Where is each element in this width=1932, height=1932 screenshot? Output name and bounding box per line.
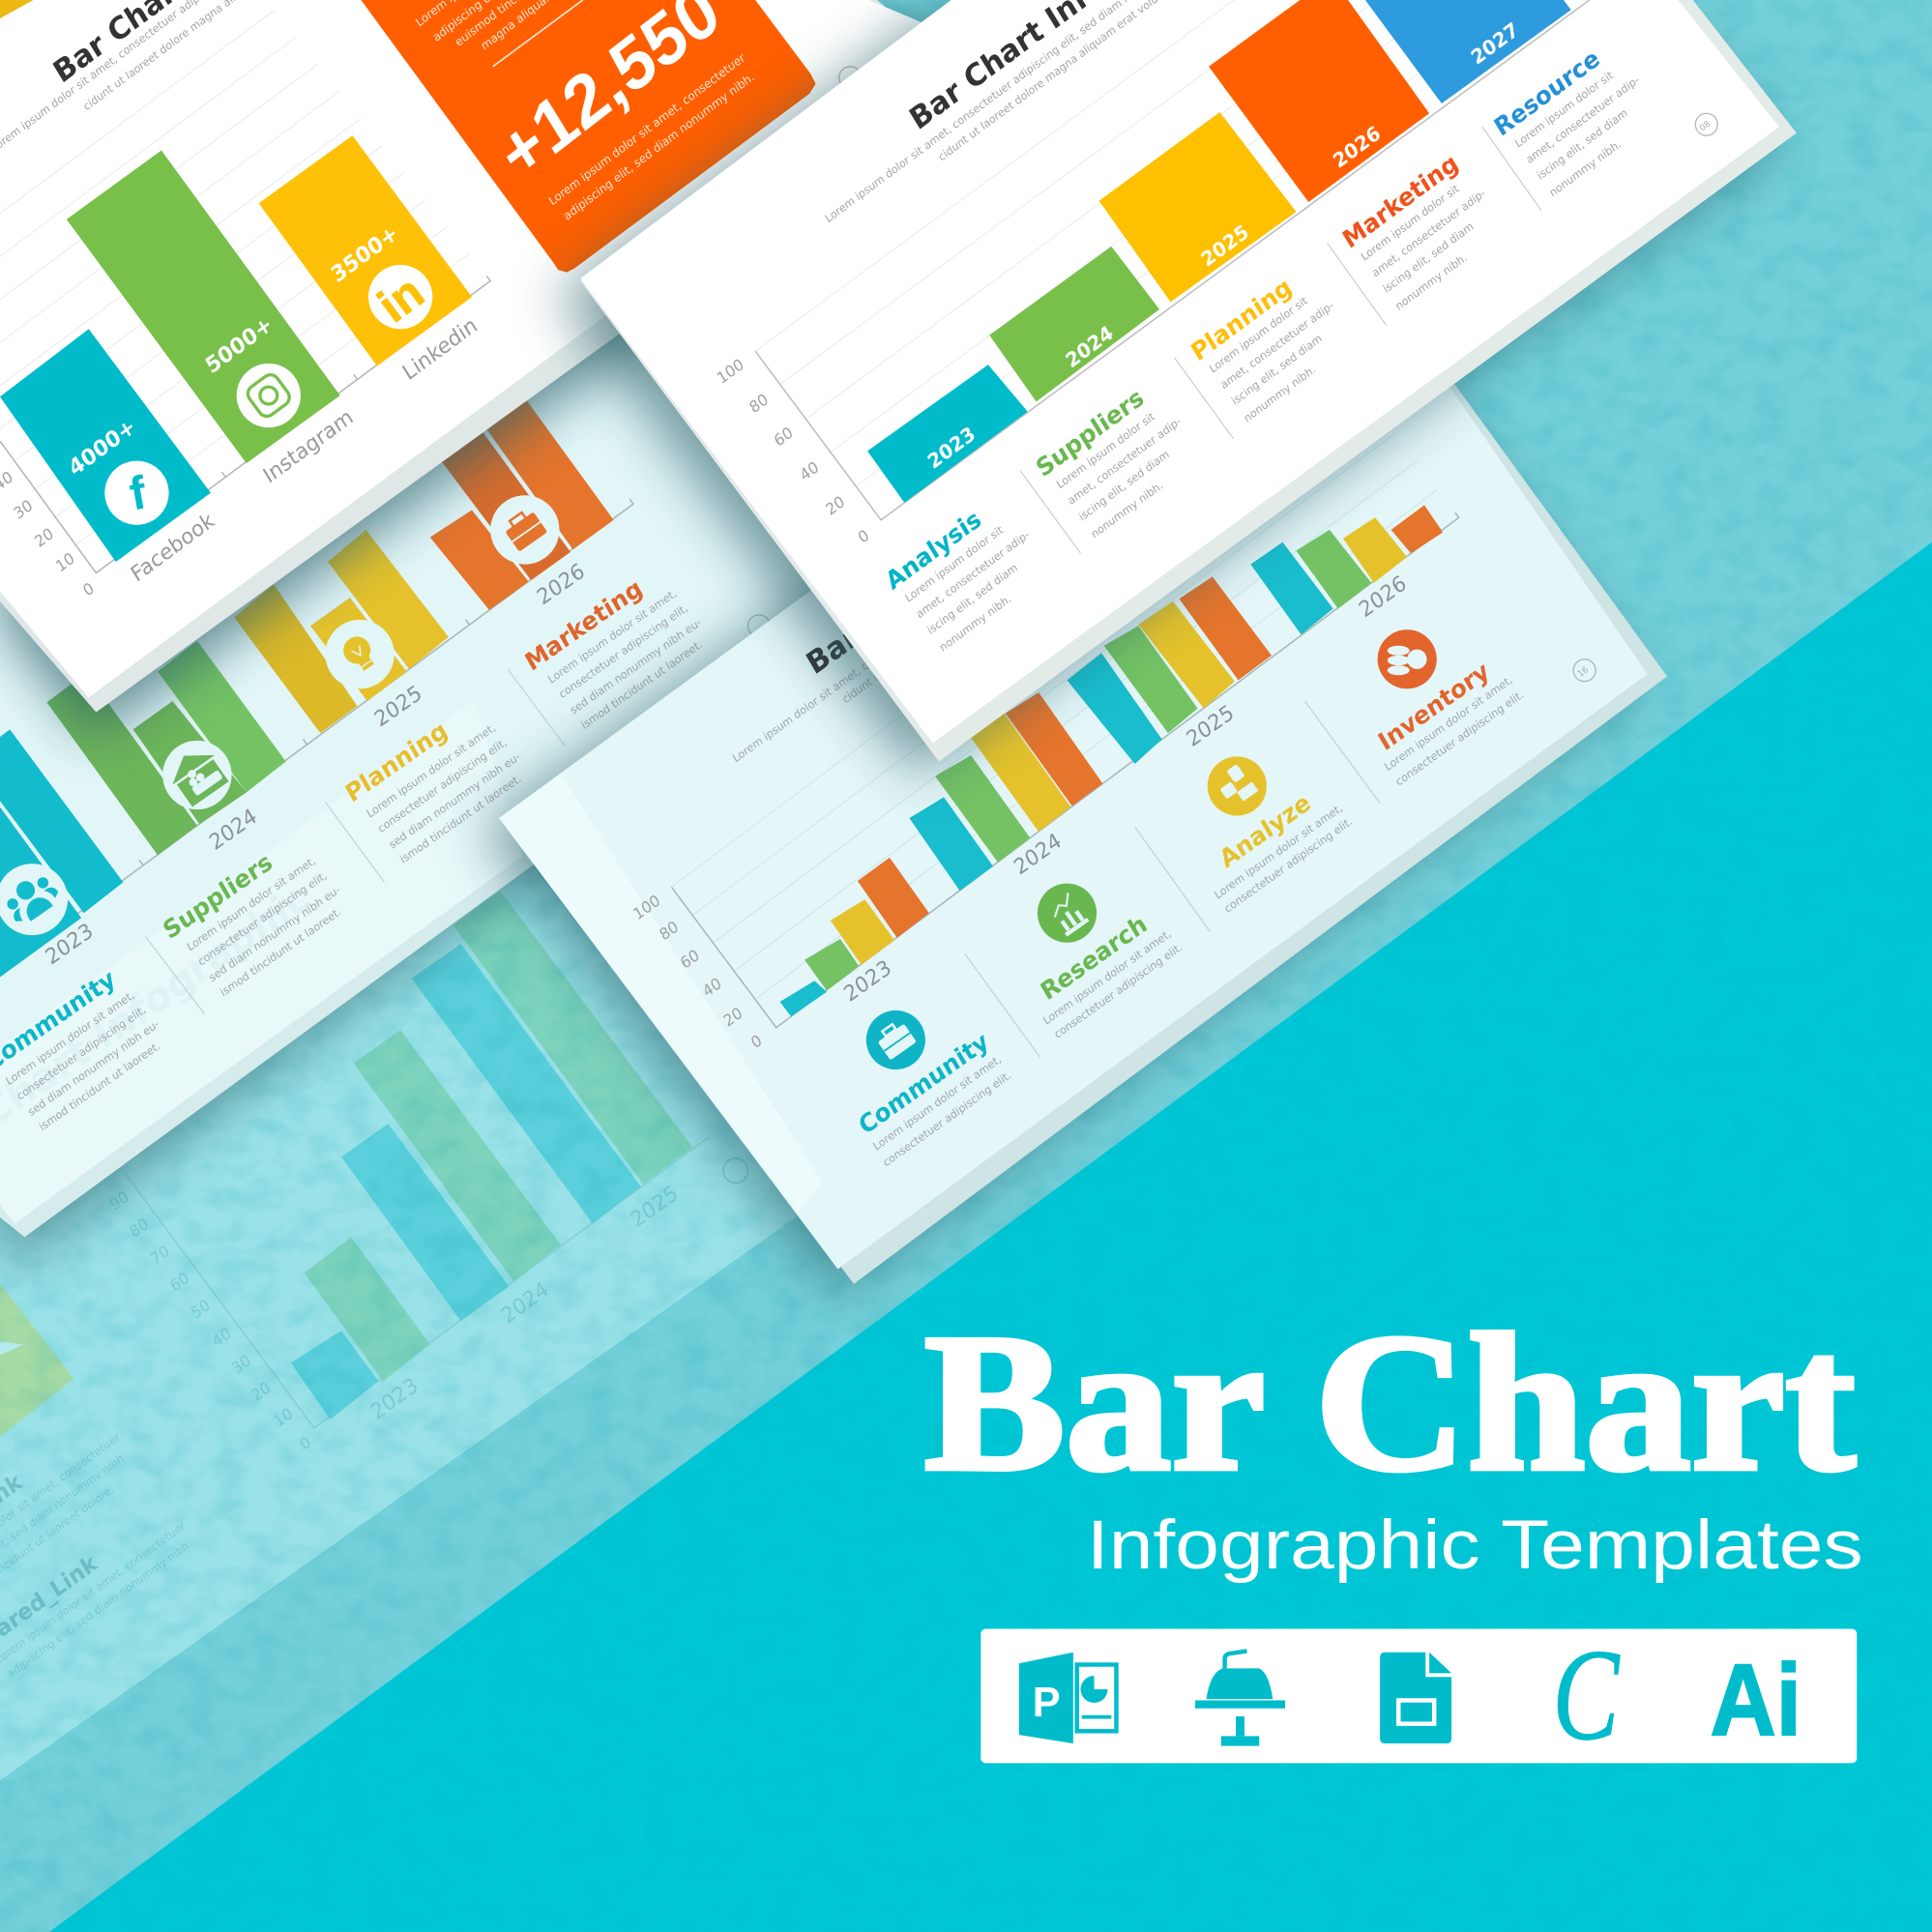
axis labels: 60 [771, 423, 796, 451]
page number [747, 615, 770, 637]
column: resource: amet, consectetuer adip- [1524, 73, 1642, 166]
column: suppliers: amet, consectetuer adip- [1066, 414, 1184, 508]
column: analyze: Lorem ipsum dolor sit amet, [1212, 801, 1345, 902]
column: suppliers: iscing elit, sed diam [1076, 447, 1171, 524]
axis [755, 0, 1590, 520]
faded axis labels: 60 [167, 1268, 192, 1296]
page number [839, 67, 862, 89]
icon: fists [1196, 745, 1278, 828]
column: analyze: Analyze [1215, 788, 1315, 873]
icon: Keynote [1195, 1651, 1285, 1746]
faded axis labels: 2025 [627, 1181, 683, 1233]
column: marketing: ismod tincidunt ut laoreet. [578, 637, 705, 732]
axis [0, 276, 490, 573]
icon: PowerPoint: P [1033, 1680, 1061, 1726]
column: inventory: Lorem ipsum dolor sit amet, [1382, 672, 1514, 774]
year labels: 2023 [840, 955, 895, 1008]
bar: facebook: f [126, 466, 151, 520]
axis labels: 80 [657, 917, 682, 944]
bar: facebook [0, 329, 211, 562]
bars 2024 [909, 692, 1102, 891]
column: analyze: consectetuer adipiscing elit. [1222, 814, 1355, 916]
bar 2025 [1099, 112, 1296, 302]
column: community: consectetuer adipiscing elit, [15, 1003, 148, 1102]
icon: coins [1378, 629, 1437, 688]
category labels: Linkedin [398, 313, 482, 386]
axis labels: 100 [630, 891, 663, 923]
icon: briefcase [855, 999, 937, 1081]
bar: instagram [67, 150, 340, 463]
axis labels: 80 [746, 390, 772, 417]
year labels: 2024 [1010, 829, 1066, 881]
column: marketing: sed diam nonummy nibh eu- [568, 615, 704, 717]
icon: people [0, 850, 82, 950]
faded page number [723, 1158, 747, 1183]
column: community [0, 964, 162, 1133]
year labels: 2025 [370, 681, 426, 733]
bars 2026 [430, 398, 614, 610]
column: community [854, 999, 1013, 1169]
bar: linkedin: in [368, 266, 433, 333]
column: planning: sed diam nonummy nibh eu- [387, 749, 522, 852]
bar: facebook: 4000+ [65, 414, 140, 482]
column: marketing: Lorem ipsum dolor sit amet, [545, 586, 679, 687]
column: analysis: Analysis [881, 505, 986, 596]
axis labels [630, 891, 765, 1052]
axis labels: 40 [699, 974, 724, 1001]
faded axis labels: 40 [209, 1324, 234, 1351]
column: planning: ismod tincidunt ut laoreet. [397, 771, 523, 866]
lighter strip [499, 774, 822, 1213]
slide C subtitle: cidunt ut laoreet dolore magna aliquam [840, 568, 1024, 706]
faded axis labels: 70 [147, 1241, 172, 1269]
x axis [0, 499, 633, 971]
icon: Illustrator: Ai [1711, 1644, 1801, 1757]
bars 2023 [780, 858, 929, 1016]
year labels: 2026 [1355, 571, 1411, 623]
panel: orange callout [361, 0, 816, 273]
column: marketing: consectetuer adipiscing elit, [557, 600, 690, 701]
column: resource: Lorem ipsum dolor sit [1512, 68, 1616, 150]
column: suppliers: Lorem ipsum dolor sit amet, [185, 854, 318, 953]
shadow of slide C [482, 221, 1640, 1294]
column: marketing: Marketing [1337, 148, 1463, 254]
title: Bar Chart [924, 1294, 1856, 1512]
column: suppliers [159, 847, 343, 999]
column: marketing: iscing elit, sed diam [1381, 219, 1476, 296]
year labels: 2026 [534, 559, 589, 610]
faded axis labels: 90 [106, 1186, 132, 1215]
faded axis labels: 2024 [498, 1277, 553, 1330]
slide C title: Bar Chart Infographic [802, 444, 1111, 682]
column: resource: iscing elit, sed diam [1535, 105, 1630, 183]
column: community: Lorem ipsum dolor sit amet, [870, 1052, 1004, 1154]
column: planning: Planning [1186, 273, 1297, 366]
column: analysis: nonummy nibh. [937, 592, 1013, 655]
column: community: sed diam nonummy nibh eu- [25, 1016, 161, 1119]
panel: faded slide [0, 863, 801, 1780]
bars 2024 [46, 641, 286, 855]
lighter panel [0, 700, 522, 1223]
faded axis labels: 20 [249, 1378, 274, 1405]
icon: PowerPoint [1019, 1653, 1116, 1743]
column: suppliers: sed diam nonummy nibh eu- [207, 882, 342, 984]
corner accent [0, 0, 33, 18]
faded axis labels: 80 [127, 1214, 152, 1242]
bar 2026: 2026 [1329, 121, 1385, 173]
column: research [1026, 872, 1185, 1041]
subtitle: Infographic Templates [1087, 1507, 1863, 1584]
year labels: 2023 [42, 919, 98, 970]
panel: slide C [499, 384, 1667, 1284]
column: inventory [1373, 629, 1526, 789]
category labels [127, 313, 482, 588]
bars 2023 [0, 729, 123, 977]
axis labels: 20 [822, 492, 848, 519]
faded axis labels: 0 [297, 1432, 314, 1454]
column: planning: iscing elit, sed diam [1229, 331, 1325, 408]
year labels: 2024 [206, 805, 261, 856]
panel: software icons [981, 1624, 1857, 1768]
panel: slide A [580, 0, 1797, 761]
panel: slide B [0, 320, 887, 1237]
bar 2026 [1209, 0, 1429, 202]
column: resource [1489, 44, 1642, 199]
shadow of slide B [0, 320, 863, 1257]
faded axis labels: 10 [271, 1404, 296, 1431]
axis labels: 0 [79, 578, 97, 600]
axis labels: 40 [797, 457, 822, 484]
column: planning: Lorem ipsum dolor sit amet, [365, 720, 498, 821]
icon: warehouse truck [149, 727, 246, 823]
column: suppliers: consectetuer adipiscing elit, [195, 868, 329, 969]
faded axis labels: 30 [228, 1351, 254, 1378]
column: marketing: amet, consectetuer adip- [1369, 186, 1488, 279]
slide 1 subtitle [0, 0, 236, 148]
column: inventory: consectetuer adipiscing elit. [1393, 688, 1526, 789]
column: planning [1186, 273, 1336, 425]
icon: chart [1026, 872, 1108, 954]
column: analyze [1196, 745, 1355, 916]
icon: Canva: C [1553, 1624, 1621, 1768]
slide C subtitle [733, 663, 878, 762]
category labels: Instagram [259, 405, 358, 489]
axis labels [0, 467, 97, 600]
column: suppliers: Suppliers [1031, 383, 1149, 483]
column: analysis [881, 505, 1032, 655]
axis labels: 0 [747, 1031, 765, 1052]
year labels [42, 559, 589, 970]
bar 2027 [1365, 0, 1571, 103]
column: resource: nonummy nibh. [1547, 136, 1624, 199]
callout top text [416, 0, 549, 50]
column: analysis: Lorem ipsum dolor sit [902, 522, 1006, 605]
column: marketing: Marketing [520, 573, 647, 677]
faded axis labels: 2023 [366, 1373, 423, 1425]
axis [671, 512, 1459, 1028]
axis labels: 100 [714, 355, 746, 388]
bar: instagram: 5000+ [201, 311, 278, 379]
faded grid and axis [126, 1137, 709, 1428]
column: marketing [520, 573, 705, 732]
column: analysis: amet, consectetuer adip- [914, 527, 1032, 621]
column: suppliers [1031, 383, 1184, 541]
bar 2024 [989, 247, 1159, 401]
column: research: consectetuer adipiscing elit. [1052, 940, 1185, 1041]
shadow of slide 1 [0, 17, 985, 738]
axis labels: 0 [855, 526, 872, 547]
faded axis labels [106, 1181, 683, 1454]
faded text blocks: adipiscing elit, sed diam nonummy nibh [5, 1538, 191, 1681]
axis labels: 60 [677, 946, 702, 973]
bar: linkedin: 3500+ [327, 220, 403, 288]
callout bottom text: adipiscing elit, sed diam nonummy nibh. [561, 70, 756, 223]
column: research: Research [1036, 909, 1152, 1006]
page number: 08 [1698, 119, 1712, 133]
column: resource: Resource [1489, 44, 1604, 142]
column: inventory: Inventory [1373, 657, 1494, 756]
axis labels [714, 355, 872, 547]
column: marketing: Lorem ipsum dolor sit [1359, 181, 1462, 264]
bars 2026 [1250, 505, 1443, 634]
faded text blocks [0, 1430, 191, 1681]
faded axis labels: 50 [188, 1296, 214, 1323]
icon: briefcase [477, 482, 573, 578]
column: planning: consectetuer adipiscing elit, [375, 735, 509, 835]
column: suppliers: Lorem ipsum dolor sit [1054, 409, 1157, 491]
callout bottom text: Lorem ipsum dolor sit amet, consectetuer [546, 50, 747, 208]
solid teal diagonal area [49, 542, 1932, 1932]
column: marketing: nonummy nibh. [1392, 250, 1470, 313]
icon: Google Slides [1380, 1653, 1451, 1743]
bar 2024: 2024 [1062, 321, 1117, 372]
column: community: Lorem ipsum dolor sit amet, [3, 987, 136, 1088]
year labels [840, 571, 1411, 1008]
bar: linkedin [259, 135, 472, 366]
column: research: Lorem ipsum dolor sit amet, [1040, 926, 1173, 1028]
bars 2025 [1067, 576, 1272, 764]
bar 2025: 2025 [1197, 220, 1253, 272]
column: planning: Planning [340, 716, 452, 808]
bars 2025 [234, 530, 449, 733]
faded icon box [0, 1284, 73, 1437]
axis labels: 10 [52, 548, 77, 576]
column: suppliers: ismod tincidunt ut laoreet. [218, 904, 343, 999]
column: marketing [1337, 148, 1488, 313]
shadow of slide A [558, 15, 1774, 776]
column: planning: Lorem ipsum dolor sit [1207, 293, 1310, 376]
page number [1573, 659, 1595, 682]
bar 2027: 2027 [1467, 17, 1523, 70]
bar 2023 [867, 365, 1028, 503]
category labels: Facebook [127, 508, 220, 588]
column: community: Community [854, 1027, 993, 1140]
column: suppliers: Suppliers [159, 847, 277, 945]
icon: light bulb [311, 606, 408, 702]
page number: 16 [1576, 665, 1591, 680]
bar 2023: 2023 [923, 422, 980, 474]
slide C subtitle: Lorem ipsum dolor sit amet, consectetuer adipiscing elit, sed diam [730, 541, 1036, 765]
column: community: ismod tincidunt ut laoreet. [37, 1039, 162, 1133]
axis labels: 20 [720, 1004, 746, 1031]
column: community: consectetuer adipiscing elit. [881, 1068, 1013, 1169]
page number [1695, 113, 1717, 135]
column: planning: nonummy nibh. [1242, 363, 1318, 425]
panel: slide 1 [0, 0, 985, 713]
axis labels: 30 [11, 496, 36, 523]
column: planning [340, 716, 523, 866]
faded bar chart [291, 891, 692, 1420]
year labels: 2025 [1183, 700, 1239, 752]
axis labels: 20 [31, 524, 57, 551]
column: planning: amet, consectetuer adip- [1218, 298, 1336, 392]
column: suppliers: nonummy nibh. [1089, 478, 1165, 541]
column: analysis: iscing elit, sed diam [924, 560, 1020, 637]
